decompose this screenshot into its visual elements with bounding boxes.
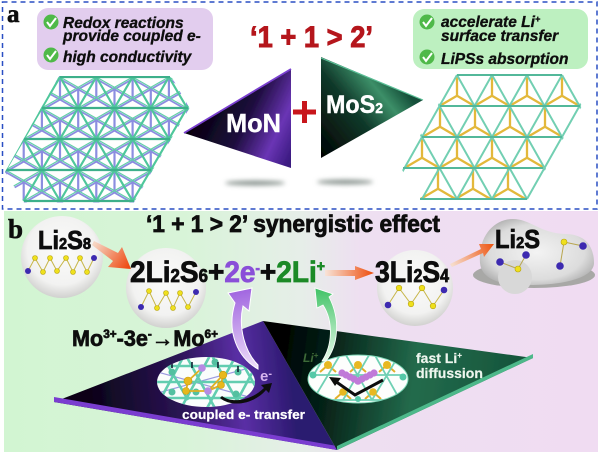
label a: a [7, 1, 20, 28]
formula: reaction intermediate: 2Li2S6+2e [130, 256, 258, 289]
arrow: Li2S4 to Li2S [450, 244, 494, 267]
label: fast Li+ diffusion: fast Li [416, 350, 457, 366]
callout: MoN benefits [37, 8, 213, 70]
formula: reaction intermediate: 2Li [276, 256, 317, 289]
plus sign [293, 101, 316, 123]
adsorbed polysulfide [182, 368, 227, 394]
label: Li+ on plate: + [314, 351, 319, 360]
text: accelerate transfer: surface transfer [441, 28, 559, 45]
heading: synergistic effect: ‘1 + 1 > 2’ synergistic effect [146, 211, 440, 238]
purple atoms [198, 364, 212, 395]
magnified MoN surface [157, 357, 255, 407]
label: electron: - [268, 368, 272, 380]
lattice: MoS2 [402, 74, 582, 200]
arrow: electrons to 2e- [228, 288, 258, 369]
molecule: Li2S4 [385, 285, 447, 309]
icon: check 4 [420, 50, 434, 64]
shadow: MoN [225, 180, 285, 186]
arrow: electron transfer in plane [220, 383, 272, 404]
text: redox reactions: Redox reactions [63, 15, 184, 32]
formula: Mo oxidation: Mo [72, 326, 104, 351]
label: fast Li+ diffusion: + [457, 351, 462, 360]
text: accelerate transfer: accelerate Li [441, 14, 536, 31]
lithium pathway atoms [338, 369, 378, 385]
label b: b [8, 214, 23, 244]
yellow Mo-S atoms [324, 361, 391, 396]
formula: Li2S8: Li2S8 [38, 225, 91, 255]
lattice: MoN [5, 76, 190, 202]
panel: b, synergistic reaction [4, 211, 598, 452]
lattice inside lens [157, 357, 255, 407]
icon: check 1 [44, 14, 58, 30]
arrow: Li2S8 to Li2S6 [92, 241, 131, 269]
callout: MoS2 benefits [413, 9, 588, 69]
teal nodes [310, 372, 406, 402]
triangle: MoN [184, 69, 291, 168]
formula: reaction intermediate: - [256, 260, 260, 276]
panel b background [4, 211, 598, 452]
sphere: Li2S4 [377, 250, 453, 326]
sphere: Li2S8 [21, 216, 103, 298]
triangle: MoS2 [321, 57, 423, 158]
icon: check 2 [44, 48, 58, 62]
formula: Mo oxidation: - [148, 327, 152, 341]
blob: Li2S [473, 219, 595, 294]
sphere: Li2S6 [126, 248, 206, 328]
molecule: Li2S [496, 239, 587, 272]
icon: check 3 [420, 14, 434, 30]
formula: Mo oxidation: -3e [117, 326, 148, 351]
text: redox reactions: high conductivity [63, 49, 193, 66]
formula: reaction intermediate: + [317, 258, 325, 275]
plate: MoS2 [263, 321, 533, 450]
label: fast Li+ diffusion: diffussion [416, 365, 483, 381]
panel: a, MoN and MoS2 components [0, 1, 600, 209]
magnified MoS2 surface [308, 350, 408, 403]
label: MoS2: MoS2 [326, 91, 383, 119]
arrow: lithium to 2Li+ [315, 288, 337, 361]
formula: reaction intermediate: + [260, 256, 276, 289]
formula: Li2S: Li2S [495, 224, 540, 254]
shadow: MoS2 [317, 180, 373, 184]
arrow: Li+ to Li2S4 [325, 266, 374, 280]
lattice inside lens [312, 350, 405, 400]
label: Li+ on plate: Li [303, 351, 314, 365]
label: coupled e- transfer: coupled e- transfer [182, 407, 305, 422]
heading: 1+1>2: ‘1 + 1 > 2’ [250, 21, 373, 54]
plate: MoN [54, 321, 337, 450]
text: redox reactions: provide coupled e- [62, 28, 201, 45]
molecule: Li2S6 [138, 288, 199, 310]
label: electron: e [260, 368, 268, 385]
formula: Li2S4: 3Li2S4 [375, 256, 449, 289]
arrow: lithium diffusion [335, 380, 383, 395]
formula: Mo oxidation: 6+ [205, 327, 218, 341]
formula: Mo oxidation: →Mo [152, 326, 205, 351]
label: MoN: MoN [226, 108, 281, 138]
formula: Mo oxidation: 3+ [103, 327, 117, 341]
text: accelerate transfer: + [535, 14, 541, 24]
panel a dashed border [2, 2, 597, 209]
text: accelerate transfer: LiPSs absorption [441, 51, 568, 68]
molecule: Li2S8 [25, 255, 97, 274]
